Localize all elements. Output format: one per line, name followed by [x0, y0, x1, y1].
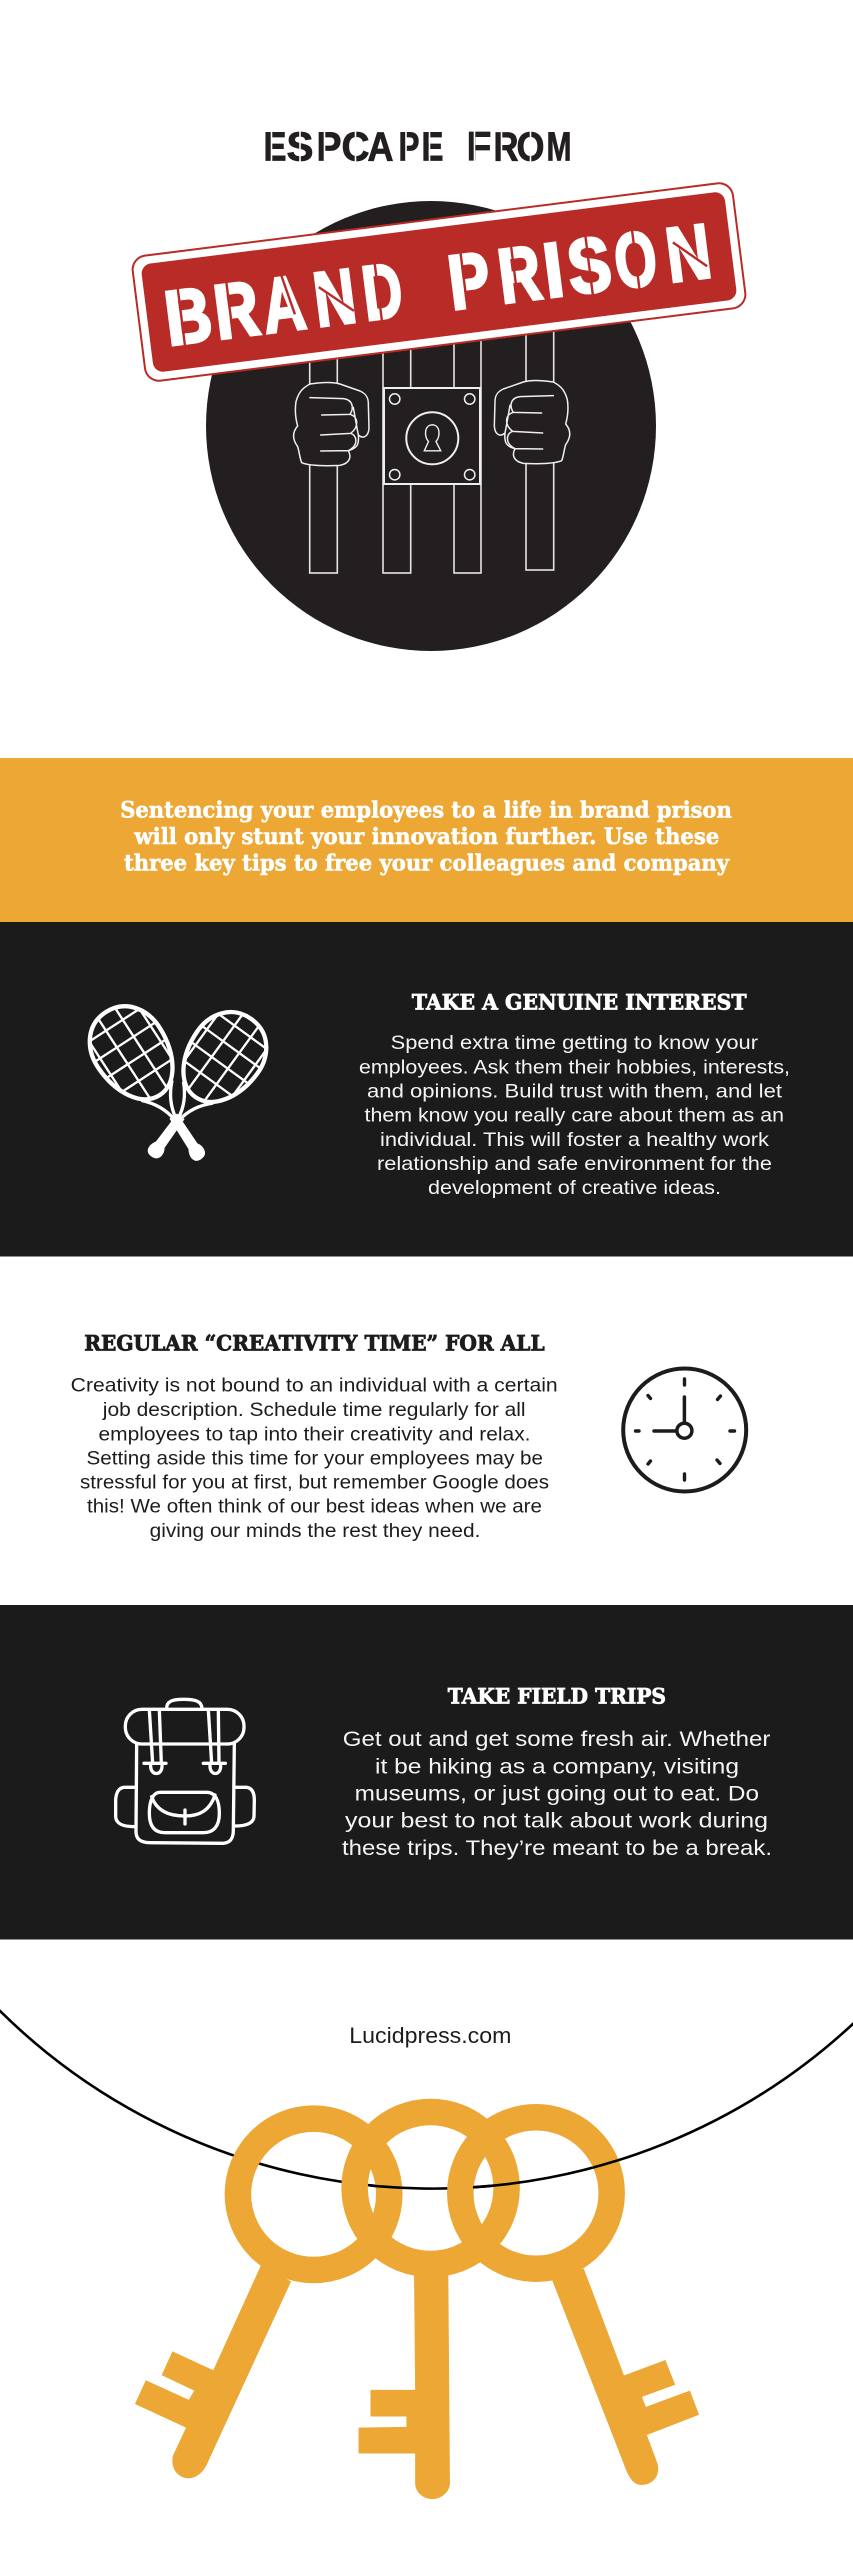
intro text — [120, 798, 732, 876]
red sign: brand prison: I — [539, 227, 568, 314]
body text: Setting aside this time for your employees may be — [86, 1447, 543, 1469]
body text: this! We often think of our best ideas when we are — [87, 1496, 542, 1518]
header illustration — [130, 124, 748, 651]
title: escape from: P — [398, 124, 420, 170]
icon: crossed rackets — [88, 1004, 268, 1161]
title: escape from: F — [466, 124, 492, 170]
panel: take a genuine interest — [0, 922, 853, 1256]
panel: regular creativity time — [0, 1256, 853, 1605]
body text: employees to tap into their creativity and relax. — [98, 1423, 530, 1445]
key ring wire — [0, 2008, 853, 2189]
left racket — [88, 1004, 205, 1161]
icon: backpack — [116, 1699, 254, 1843]
title: escape from: E — [422, 124, 444, 170]
body text: them know you really care about them as an — [364, 1105, 784, 1127]
body text — [71, 1375, 558, 1542]
red sign: brand prison: S — [563, 221, 616, 311]
red sign: brand prison: B — [160, 271, 217, 362]
title: escape from: M — [546, 124, 572, 170]
body text: it be hiking as a company, visiting — [375, 1754, 739, 1778]
title: escape from: O — [516, 124, 544, 170]
right racket — [148, 1010, 268, 1158]
panel: orange intro band — [0, 758, 853, 922]
title: escape from: C — [342, 124, 370, 170]
lock plate — [384, 388, 480, 484]
body text: development of creative ideas. — [428, 1177, 721, 1199]
title: escape from: P — [316, 124, 342, 170]
body text: your best to not talk about work during — [345, 1809, 768, 1833]
body text: Spend extra time getting to know your — [391, 1032, 759, 1054]
red sign: brand prison: R — [209, 265, 264, 356]
left hand — [294, 382, 369, 466]
body text: employees. Ask them their hobbies, interests, — [359, 1056, 790, 1078]
heading: REGULAR “CREATIVITY TIME” FOR ALL — [84, 1331, 545, 1356]
heading: TAKE FIELD TRIPS — [448, 1683, 666, 1708]
right key — [460, 2117, 699, 2485]
black circle with prison bars — [206, 201, 656, 651]
title: escape from — [264, 124, 572, 170]
body text — [359, 1032, 790, 1199]
right hand — [494, 380, 570, 464]
red sign: brand prison: P — [444, 236, 495, 326]
body text: museums, or just going out to eat. Do — [355, 1781, 759, 1805]
red sign: brand prison: A — [257, 259, 310, 350]
title: escape from: A — [368, 124, 394, 170]
left key — [135, 2119, 389, 2478]
title: escape from: S — [286, 124, 314, 170]
red sign: brand prison — [130, 180, 748, 384]
body text — [342, 1727, 772, 1860]
intro text: three key tips to free your colleagues and company — [124, 850, 730, 876]
red sign: brand prison: R — [494, 230, 546, 320]
body text: relationship and safe environment for the — [377, 1153, 772, 1175]
body text: these trips. They’re meant to be a break. — [342, 1836, 772, 1860]
red sign: brand prison: D — [358, 247, 407, 337]
body text: Get out and get some fresh air. Whether — [343, 1727, 770, 1751]
body text: job description. Schedule time regularly for all — [102, 1399, 526, 1421]
body text: Creativity is not bound to an individual with a certain — [71, 1375, 558, 1397]
prison bars — [310, 320, 554, 573]
body text: giving our minds the rest they need. — [150, 1520, 480, 1542]
red sign: brand prison: N — [309, 253, 360, 343]
wire threaded over rings — [370, 2158, 620, 2190]
intro text: will only stunt your innovation further. Use these — [133, 824, 719, 850]
body text: individual. This will foster a healthy work — [380, 1129, 769, 1151]
red sign: brand prison: N — [661, 208, 716, 299]
heading: TAKE A GENUINE INTEREST — [412, 989, 747, 1014]
footer: website link: Lucidpress.com — [349, 2023, 511, 2048]
body text: and opinions. Build trust with them, and let — [367, 1080, 783, 1102]
title: escape from: E — [264, 124, 286, 170]
intro text: Sentencing your employees to a life in brand prison — [120, 798, 732, 824]
title: escape from: R — [494, 124, 518, 170]
icon: three keys — [135, 2112, 699, 2499]
red sign: brand prison: O — [610, 215, 662, 305]
icon: clock — [623, 1368, 746, 1492]
middle key — [355, 2112, 507, 2499]
panel: take field trips — [0, 1605, 853, 1940]
body text: stressful for you at first, but remember Google does — [80, 1472, 549, 1494]
